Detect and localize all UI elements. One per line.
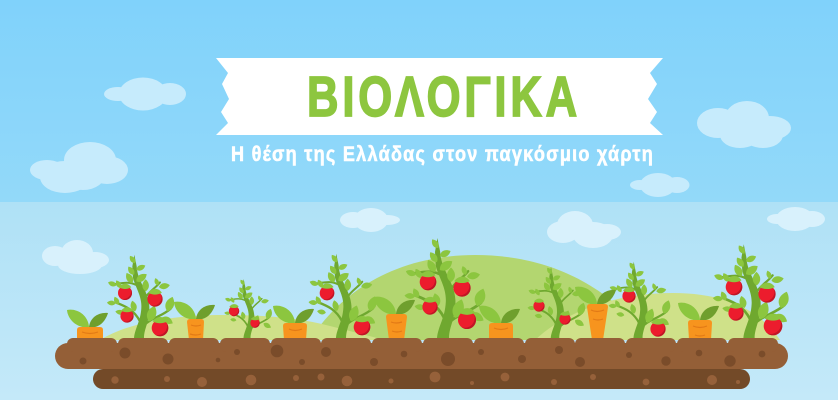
carrot 2 bbox=[174, 302, 215, 340]
hills bbox=[100, 255, 780, 340]
tomato plant 3 bbox=[308, 253, 379, 338]
tomato plant 1 bbox=[107, 254, 177, 338]
background: upper sky bbox=[0, 0, 838, 202]
banner bbox=[216, 58, 663, 135]
title: ΒΙΟΛΟΓΙΚΑ bbox=[307, 65, 581, 129]
clouds: upper sky bbox=[30, 78, 791, 197]
tomato plant 4 bbox=[404, 238, 488, 338]
carrot 7 bbox=[678, 303, 719, 340]
subtitle: Η θέση της Ελλάδας στον παγκόσμιο χάρτη bbox=[231, 142, 654, 166]
clouds: lower sky bbox=[42, 207, 825, 274]
carrot 4 bbox=[374, 297, 415, 340]
carrot 5 bbox=[479, 306, 520, 340]
carrot 3 bbox=[273, 306, 314, 340]
background: lower sky bbox=[0, 202, 838, 400]
tomato plant 2 bbox=[224, 279, 274, 338]
carrot 1 bbox=[67, 310, 108, 340]
tomato plant 5 bbox=[527, 267, 587, 338]
lower soil layer bbox=[93, 369, 750, 389]
upper soil layer bbox=[55, 338, 788, 369]
tomato plant 6 bbox=[608, 262, 672, 338]
tomato plant 7 bbox=[713, 244, 791, 338]
carrot 6 bbox=[575, 287, 616, 340]
